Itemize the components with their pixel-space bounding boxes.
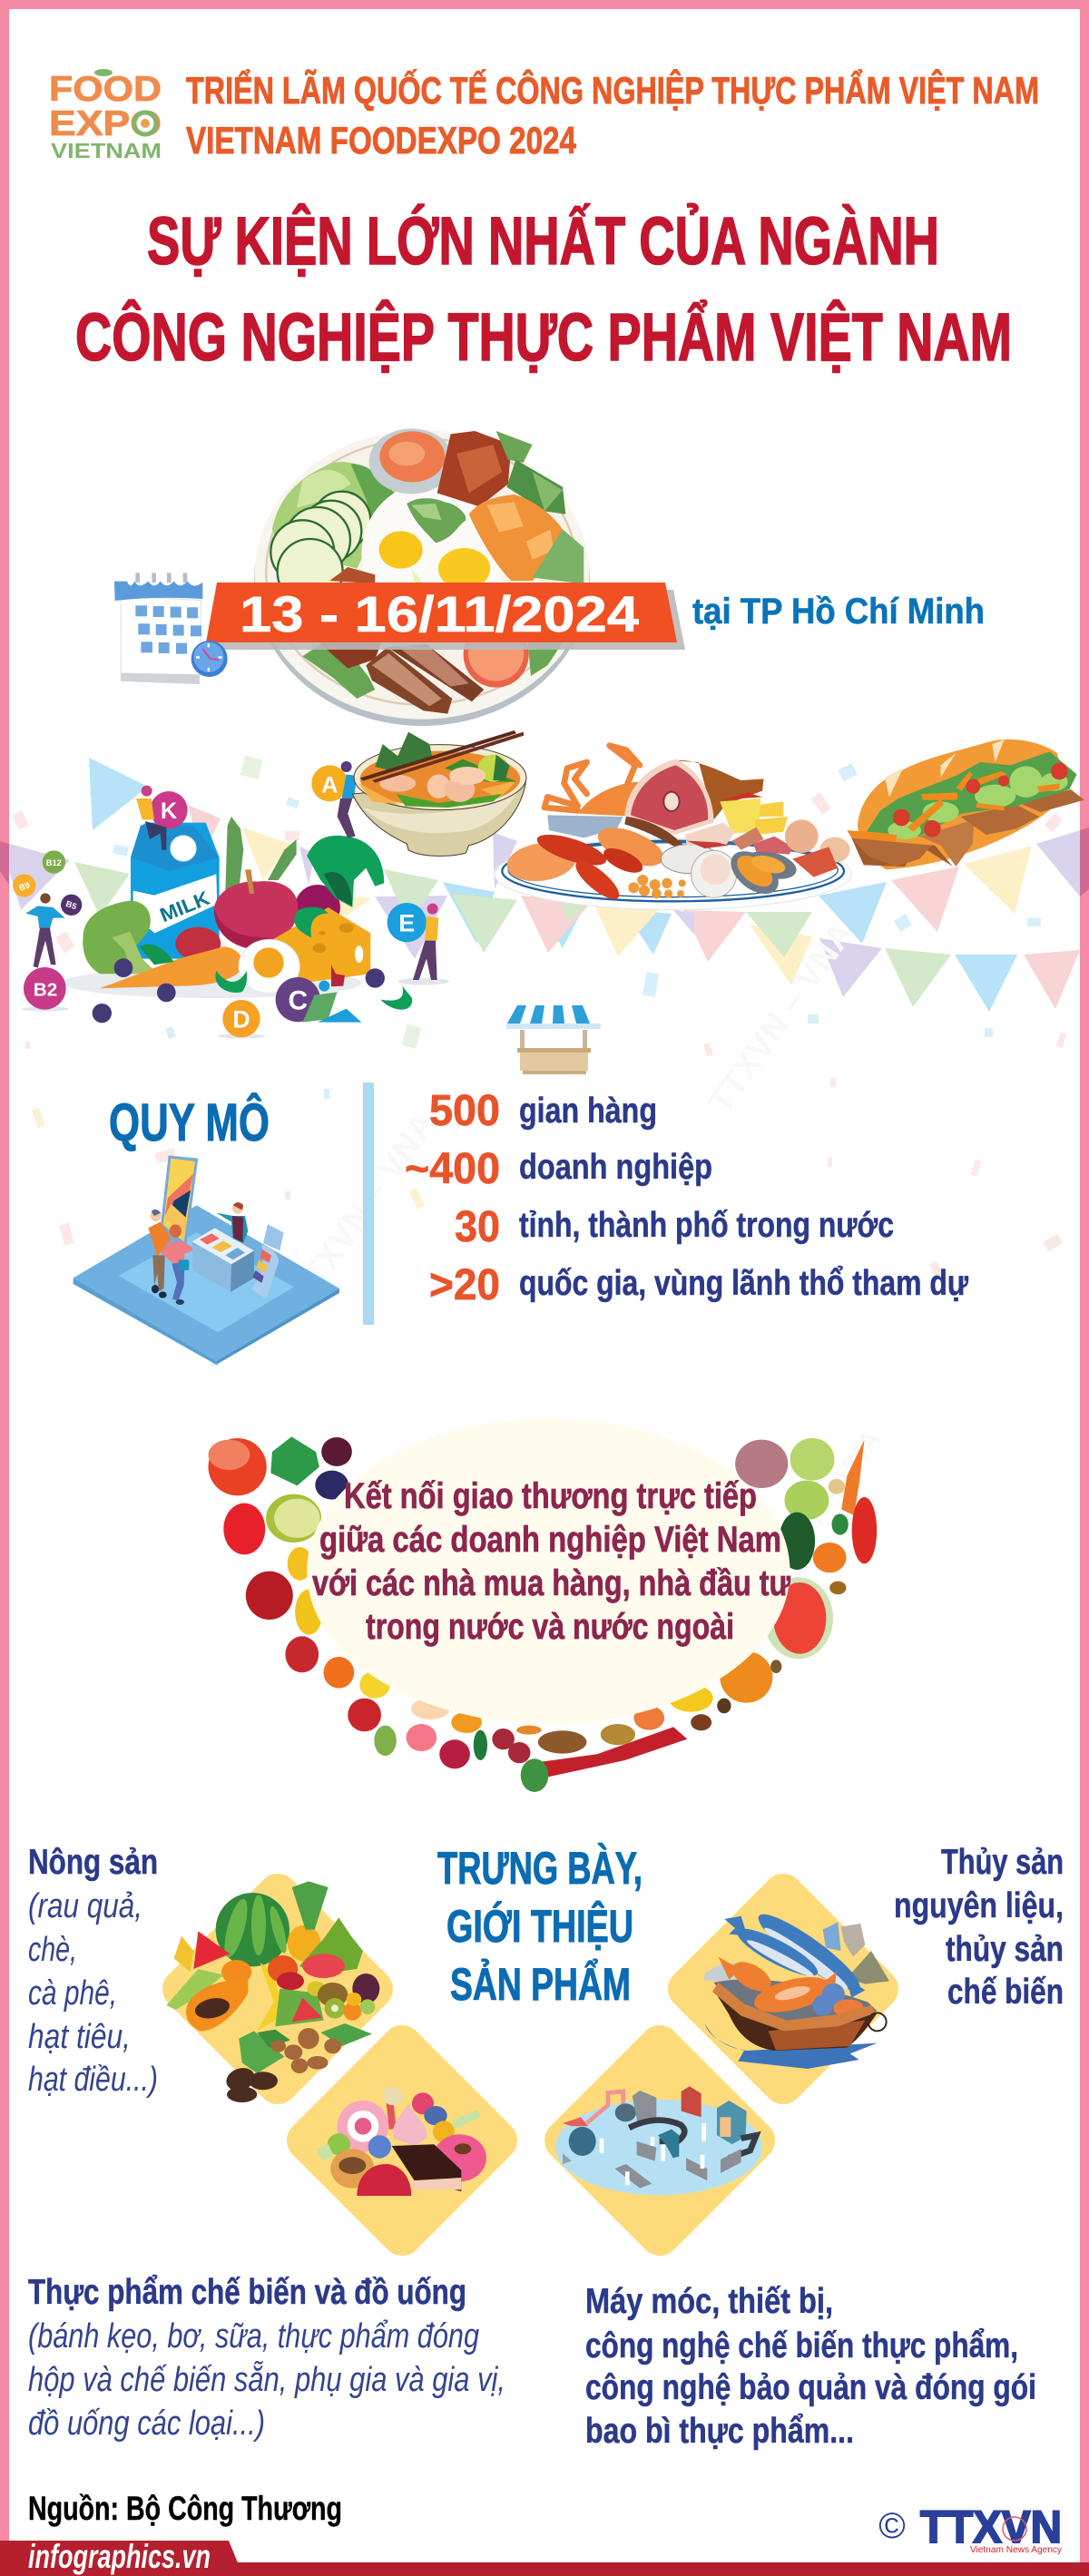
carrot [100,946,242,988]
callout text: trong nước và nước ngoài [366,1607,734,1647]
text: machinery: Máy móc, thiết bị, [585,2282,833,2321]
cheese [270,907,370,983]
leaves [215,971,247,993]
banner stand [161,1155,198,1249]
source: Nguồn: Bộ Công Thương [28,2490,342,2527]
callout text: với các nhà mua hàng, nhà đầu tư [312,1563,790,1603]
illustration: rice plate [254,428,590,726]
watermarks [284,916,888,1587]
text: agricultural products: Nông sản [28,1843,158,1882]
logo: Food Expo Vietnam: VIETNAM [51,139,162,162]
text: agricultural products: cà phê, [28,1974,117,2013]
text: agricultural products: hạt tiêu, [28,2018,131,2056]
text: agricultural products: hạt điều...) [28,2061,158,2099]
egg [239,940,299,993]
logo: Food Expo Vietnam [49,69,162,162]
illustration: seafood platter [495,746,851,910]
roe [628,875,686,898]
text: seafood: thủy sản [946,1930,1064,1969]
stat: 20 [429,1261,969,1309]
illustration: exhibition booth [74,1155,339,1365]
visitors [148,1210,197,1305]
text: processed foods and drinks: Thực phẩm chế biến và đồ uống [28,2273,466,2312]
stat: 20: quốc gia, vùng lãnh thổ tham dự [519,1264,969,1303]
cucumbers [270,492,370,604]
stat: 500 [429,1087,657,1135]
logo: TTXVN: © [878,2506,906,2546]
illustration: vitamins and foods [13,761,449,1039]
vitamin balls: B2 [34,979,57,1000]
callout text: giữa các doanh nghiệp Việt Nam [319,1520,781,1560]
stat: 30: tỉnh, thành phố trong nước [519,1206,894,1245]
text: machinery [585,2282,1036,2451]
vitamin balls: B12 [46,858,62,867]
vitamin balls: A [321,772,338,798]
basket [714,1990,878,2051]
header text: VIETNAM FOODEXPO 2024 [186,119,577,162]
yellow diamonds [182,1894,878,2236]
divider bar [363,1082,374,1325]
stat: 400 [405,1145,712,1193]
mackerel [547,815,623,837]
vitamin balls: B9 [18,880,31,893]
small people [25,761,438,1023]
eggs [785,819,819,853]
location text: tại TP Hồ Chí Minh [692,592,985,632]
cheese and butter [720,798,760,833]
illustration: noodle bowl [352,730,526,856]
blueberries [93,958,385,1023]
vitamin balls [13,765,427,1037]
text: processed foods and drinks: hộp và chế biến sẵn, phụ gia và gia vị, [28,2360,505,2399]
sauce bowl [369,428,454,494]
bunting flags [0,758,1080,1012]
watermarks: TTXVN – VNA [761,1425,888,1587]
icon: calendar [114,573,228,684]
confetti [3,756,1066,1366]
shrimp [505,838,578,886]
text: machinery: bao bì thực phẩm... [585,2412,854,2451]
header text [186,68,1039,162]
blue fish [751,1905,868,2000]
illustration: fruit and vegetable ring [209,1418,877,1792]
vitamin balls: B5 [64,899,78,911]
stat: 400: doanh nghiệp [519,1148,712,1187]
brochure stand [263,1224,284,1250]
illustration: fruits and nuts [166,1881,379,2102]
crab [578,782,638,817]
lettuce [272,462,402,569]
title [75,203,1012,375]
text: processed foods and drinks: (bánh kẹo, bơ, sữa, thực phẩm đóng [28,2317,479,2356]
apple and beet [295,885,340,930]
stat: 30 [455,1203,894,1251]
basket back [714,1980,878,2030]
milk carton: MILK [156,886,213,926]
logo: Food Expo Vietnam: EXPO [49,104,162,143]
logo: TTXVN: Vietnam News Agency [970,2545,1062,2555]
vitamin balls: D [232,1006,250,1033]
salmon [593,820,669,874]
heading: product display: TRƯNG BÀY, [437,1843,643,1894]
stat: 500: gian hàng [519,1092,657,1131]
date banner [206,583,685,650]
icon: market stall [506,1005,601,1074]
text: seafood [894,1843,1064,2012]
watermarks: TTXVN – VNA [284,1106,444,1311]
stat: 30: 30 [455,1203,500,1251]
pickled vegetables [469,495,564,581]
text: agricultural products: chè, [28,1931,77,1969]
lower meats and tomato [302,638,375,699]
callout text: Kết nối giao thương trực tiếp [344,1476,757,1516]
heading: product display: GIỚI THIỆU [446,1901,633,1952]
footer strip [0,2538,1089,2576]
footer strip: infographics.vn [28,2538,211,2575]
illustration: banh mi [847,739,1084,869]
callout text [312,1476,790,1647]
logo: Food Expo Vietnam: FOOD [49,70,162,109]
stat: 20: >20 [429,1261,500,1309]
clock [191,641,228,677]
milk carton [131,823,220,959]
text: processed foods and drinks [28,2273,505,2443]
bacon [685,823,735,846]
oysters [661,845,719,874]
strawberry [175,927,221,960]
illustration: sweets [316,2087,486,2196]
illustration: food factory [555,2086,762,2195]
text: agricultural products [28,1843,158,2099]
heading: product display [437,1843,643,2010]
vitamin balls: C [288,986,308,1016]
text: agricultural products: (rau quả, [28,1887,142,1925]
counter [192,1228,254,1264]
logo: TTXVN: TTXVN [920,2502,1062,2552]
text: processed foods and drinks: đồ uống các loại...) [28,2405,265,2443]
date banner: 13 - 16/11/2024 [240,585,639,642]
mussels [723,843,787,903]
lobster [534,828,610,871]
rice and eggs [361,481,506,626]
stat: 500: 500 [429,1087,500,1135]
ham [672,760,764,819]
grilled pork [437,431,511,506]
broccoli [83,901,154,974]
staff [216,1202,248,1243]
heading: product display: SẢN PHẨM [450,1959,631,2010]
orange fish [719,1957,741,1980]
stats list [405,1087,969,1309]
illustration: fish basket [703,1905,889,2069]
text: seafood: chế biến [947,1973,1064,2012]
heading: Quy mô: QUY MÔ [109,1093,270,1152]
asparagus [225,817,243,892]
vitamin balls: E [398,910,415,937]
vitamin balls: K [161,798,178,824]
stat: 400: ~400 [405,1145,500,1193]
watermarks: TTXVN – VNA [701,916,861,1121]
